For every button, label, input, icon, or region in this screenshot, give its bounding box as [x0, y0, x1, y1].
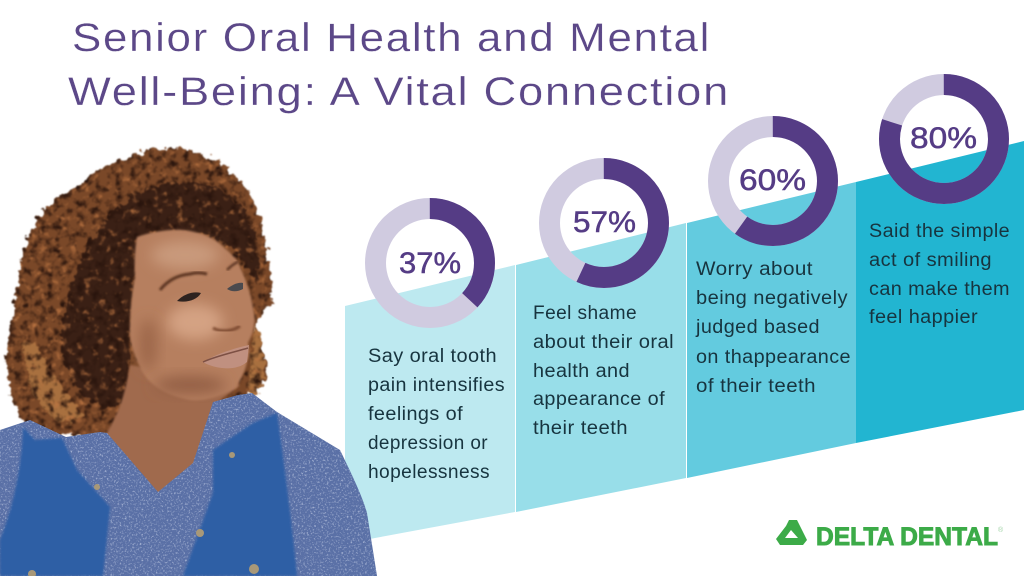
vest: left — [0, 427, 110, 576]
icon: delta triangle — [776, 520, 807, 545]
sweater — [0, 393, 377, 576]
donut: 80% — [890, 84, 998, 194]
text: 57% description: Feel shame — [533, 303, 637, 324]
text: 60% description: judged based — [695, 317, 820, 338]
text: 37% description: feelings of — [368, 404, 463, 425]
rising ribbon panel — [345, 141, 1024, 544]
logo wordmark: DELTA DENTAL — [816, 523, 998, 551]
donut: 57% — [550, 168, 658, 278]
text: 80% description: can make them — [869, 279, 1010, 300]
hair — [7, 148, 272, 437]
text: 80% description: Said the simple — [869, 221, 1010, 242]
illustration: woman portrait — [0, 148, 377, 576]
donut: 37% — [376, 208, 484, 318]
text: 80% description: feel happier — [869, 307, 978, 328]
text: 60% description: of their teeth — [696, 376, 816, 397]
text: 57% description: about their oral — [533, 332, 674, 353]
text: 80% description: act of smiling — [869, 250, 992, 271]
panel: 80% segment — [856, 141, 1024, 443]
vest buttons — [28, 452, 259, 576]
donut: 57%: 57% — [573, 206, 636, 239]
text: 60% description: Worry about — [696, 259, 813, 280]
text: 60% description — [695, 259, 851, 397]
text: 37% description: Say oral tooth — [368, 346, 497, 367]
panel: 57% segment — [516, 223, 686, 512]
text: 57% description — [533, 303, 674, 439]
panel: 60% segment — [687, 182, 856, 478]
text: 37% description: hopelessness — [368, 462, 490, 483]
text: 60% description: being negatively — [696, 288, 848, 309]
donut: 80%: 80% — [910, 122, 977, 155]
panel: 37% segment — [345, 265, 515, 544]
logo: Delta Dental — [776, 520, 1004, 551]
text: 37% description: pain intensifies — [368, 375, 505, 396]
donut: 60% — [718, 126, 828, 236]
face — [130, 230, 255, 400]
vest: right — [183, 413, 297, 576]
text: 60% description: on thappearance — [696, 347, 851, 368]
text: 57% description: their teeth — [533, 418, 628, 439]
face highlights — [139, 241, 249, 394]
title: Well-Being: A Vital Connection — [68, 70, 730, 114]
text: 57% description: appearance of — [533, 389, 665, 410]
registered mark: ® — [998, 526, 1004, 534]
text: 37% description — [368, 346, 505, 483]
title — [68, 16, 730, 114]
text: 37% description: depression or — [368, 433, 488, 454]
donut: 37%: 37% — [399, 247, 461, 280]
title: Senior Oral Health and Mental — [72, 16, 711, 60]
text: 57% description: health and — [533, 361, 630, 382]
neck — [95, 365, 240, 510]
text: 80% description — [869, 221, 1010, 328]
donut: 60%: 60% — [739, 164, 806, 197]
